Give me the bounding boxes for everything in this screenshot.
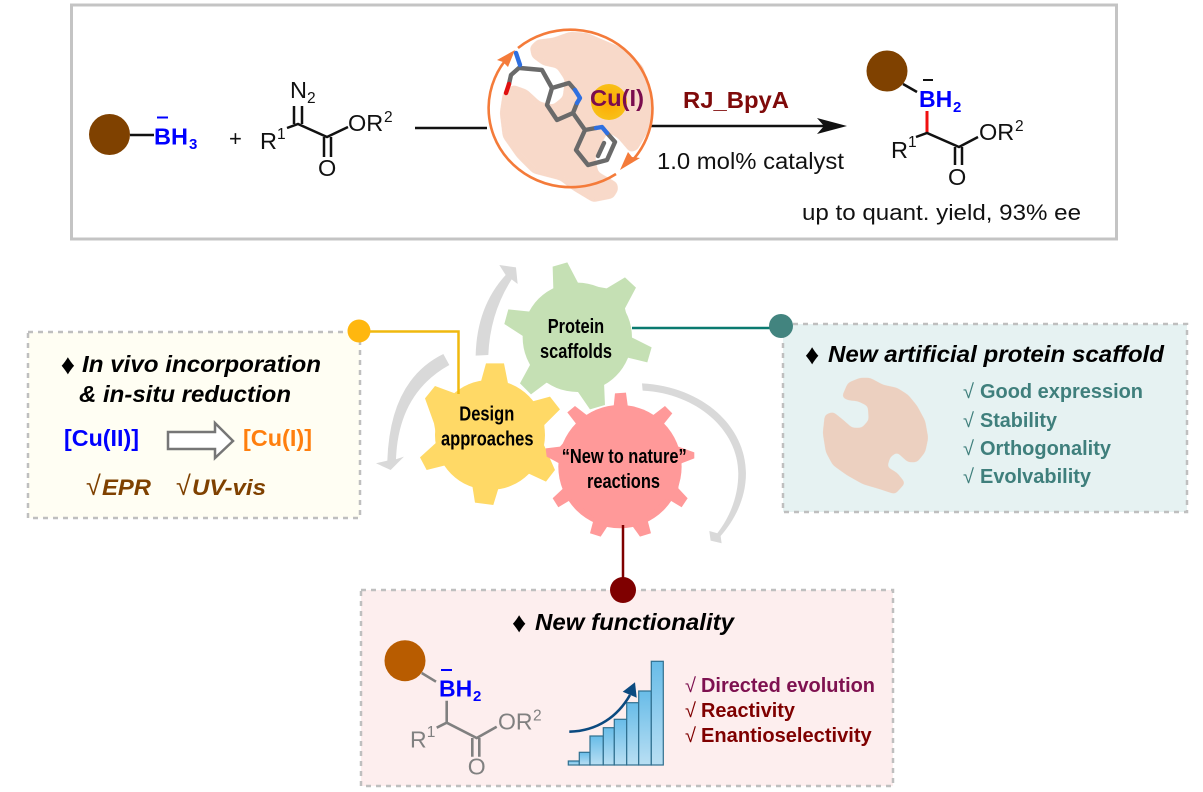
gear: new to nature reactions — [546, 393, 694, 537]
product structure: BH — [439, 676, 472, 702]
panel: new artificial protein scaffold — [783, 324, 1187, 512]
product structure: 2 — [473, 688, 481, 705]
reactant: borane: BH — [154, 124, 188, 150]
catalyst name: RJ_BpyA — [683, 87, 789, 113]
property list: Stability — [980, 410, 1058, 432]
UV-vis check: UV-vis — [192, 475, 266, 500]
product: 2 — [1015, 118, 1024, 135]
UV-vis check — [176, 471, 266, 501]
EPR check — [86, 471, 151, 501]
reaction line left — [415, 127, 487, 129]
connector: reactions to panel — [610, 525, 636, 603]
heading: In vivo incorporation — [82, 351, 321, 377]
yield and ee: up to quant. yield, 93% ee — [802, 200, 1081, 225]
reaction arrow — [650, 118, 847, 134]
property list: √ — [963, 438, 974, 460]
label: new to nature reactions — [562, 446, 687, 493]
catalyst loading: 1.0 mol% catalyst — [657, 148, 845, 174]
plus sign: + — [229, 126, 242, 151]
property list: Good expression — [980, 381, 1143, 403]
bullet: ♦ — [805, 339, 819, 370]
UV-vis check: √ — [176, 471, 191, 501]
property list: Evolvability — [980, 466, 1092, 488]
product structure: R — [410, 727, 427, 753]
product structure: 1 — [427, 724, 435, 741]
reactant: diazo ester: N — [290, 77, 307, 103]
outcome list: Directed evolution — [701, 675, 875, 697]
arrow: grey cycle right — [642, 383, 746, 543]
bar chart with rising arrow — [568, 661, 663, 765]
panel: new functionality — [361, 590, 893, 786]
reactant: diazo ester: 2 — [384, 109, 393, 126]
bipyridine ligand — [506, 53, 615, 165]
catalyst illustration: Cu(I) — [590, 85, 644, 111]
label: new to nature reactions: “New to nature” — [562, 446, 687, 468]
product: 1 — [908, 134, 917, 151]
product structure: OR — [498, 708, 532, 734]
outcome list: Reactivity — [701, 700, 796, 722]
outcome list: √ — [685, 675, 696, 697]
property list: √ — [963, 410, 974, 432]
protein blob — [500, 32, 653, 202]
bullet: ♦ — [61, 349, 75, 380]
reactant: diazo ester: OR — [348, 110, 383, 136]
arrow: grey cycle top — [476, 265, 518, 356]
outcome list — [685, 675, 875, 747]
property list: √ — [963, 466, 974, 488]
label: new to nature reactions: reactions — [587, 471, 660, 493]
label: protein scaffolds: Protein — [548, 316, 604, 338]
gear: design approaches — [420, 363, 560, 505]
product — [866, 50, 1024, 190]
gear: protein scaffolds — [504, 262, 652, 409]
label: design approaches: approaches — [441, 428, 534, 450]
product: R — [891, 137, 908, 163]
connector: design approaches to panel — [348, 320, 458, 394]
product structure: 2 — [533, 708, 542, 725]
label: design approaches: Design — [459, 404, 514, 426]
Cu(I) label: [Cu(I)] — [243, 425, 312, 451]
reactant: diazo ester: 2 — [307, 90, 316, 107]
product: BH — [919, 86, 952, 112]
product: 2 — [953, 99, 961, 116]
label: protein scaffolds: scaffolds — [540, 341, 612, 363]
Cu(II) label: [Cu(II)] — [64, 425, 139, 451]
reactant: borane: 3 — [189, 136, 197, 153]
product structure — [384, 640, 542, 779]
hollow arrow — [168, 423, 233, 458]
protein illustration — [823, 378, 928, 494]
copper ion — [591, 84, 627, 120]
heading: New functionality — [535, 609, 736, 635]
property list: Orthogonality — [980, 438, 1112, 460]
circular arrows — [489, 30, 652, 187]
EPR check: EPR — [102, 475, 151, 500]
bullet: ♦ — [512, 607, 526, 638]
label: design approaches — [441, 404, 534, 450]
arrow: grey cycle left — [376, 354, 449, 470]
heading: New artificial protein scaffold — [828, 341, 1165, 367]
catalyst illustration — [489, 30, 653, 202]
panel: reaction scheme — [72, 5, 1116, 239]
reactant: diazo ester: 1 — [277, 126, 286, 143]
reactant: diazo ester: R — [260, 128, 277, 154]
EPR check: √ — [86, 471, 101, 501]
outcome list: Enantioselectivity — [701, 725, 873, 747]
label: protein scaffolds — [540, 316, 612, 363]
outcome list: √ — [685, 700, 696, 722]
reactant: diazo ester: O — [318, 155, 336, 181]
reactant: borane — [89, 114, 197, 155]
reactant: diazo ester — [260, 77, 393, 181]
product structure: O — [468, 753, 486, 779]
property list: √ — [963, 381, 974, 403]
heading line 2: & in-situ reduction — [79, 381, 291, 407]
outcome list: √ — [685, 725, 696, 747]
panel: in vivo incorporation — [28, 332, 360, 518]
property list — [963, 381, 1143, 488]
connector: protein scaffolds to panel — [632, 314, 793, 338]
product: OR — [979, 119, 1014, 145]
product: O — [948, 164, 966, 190]
